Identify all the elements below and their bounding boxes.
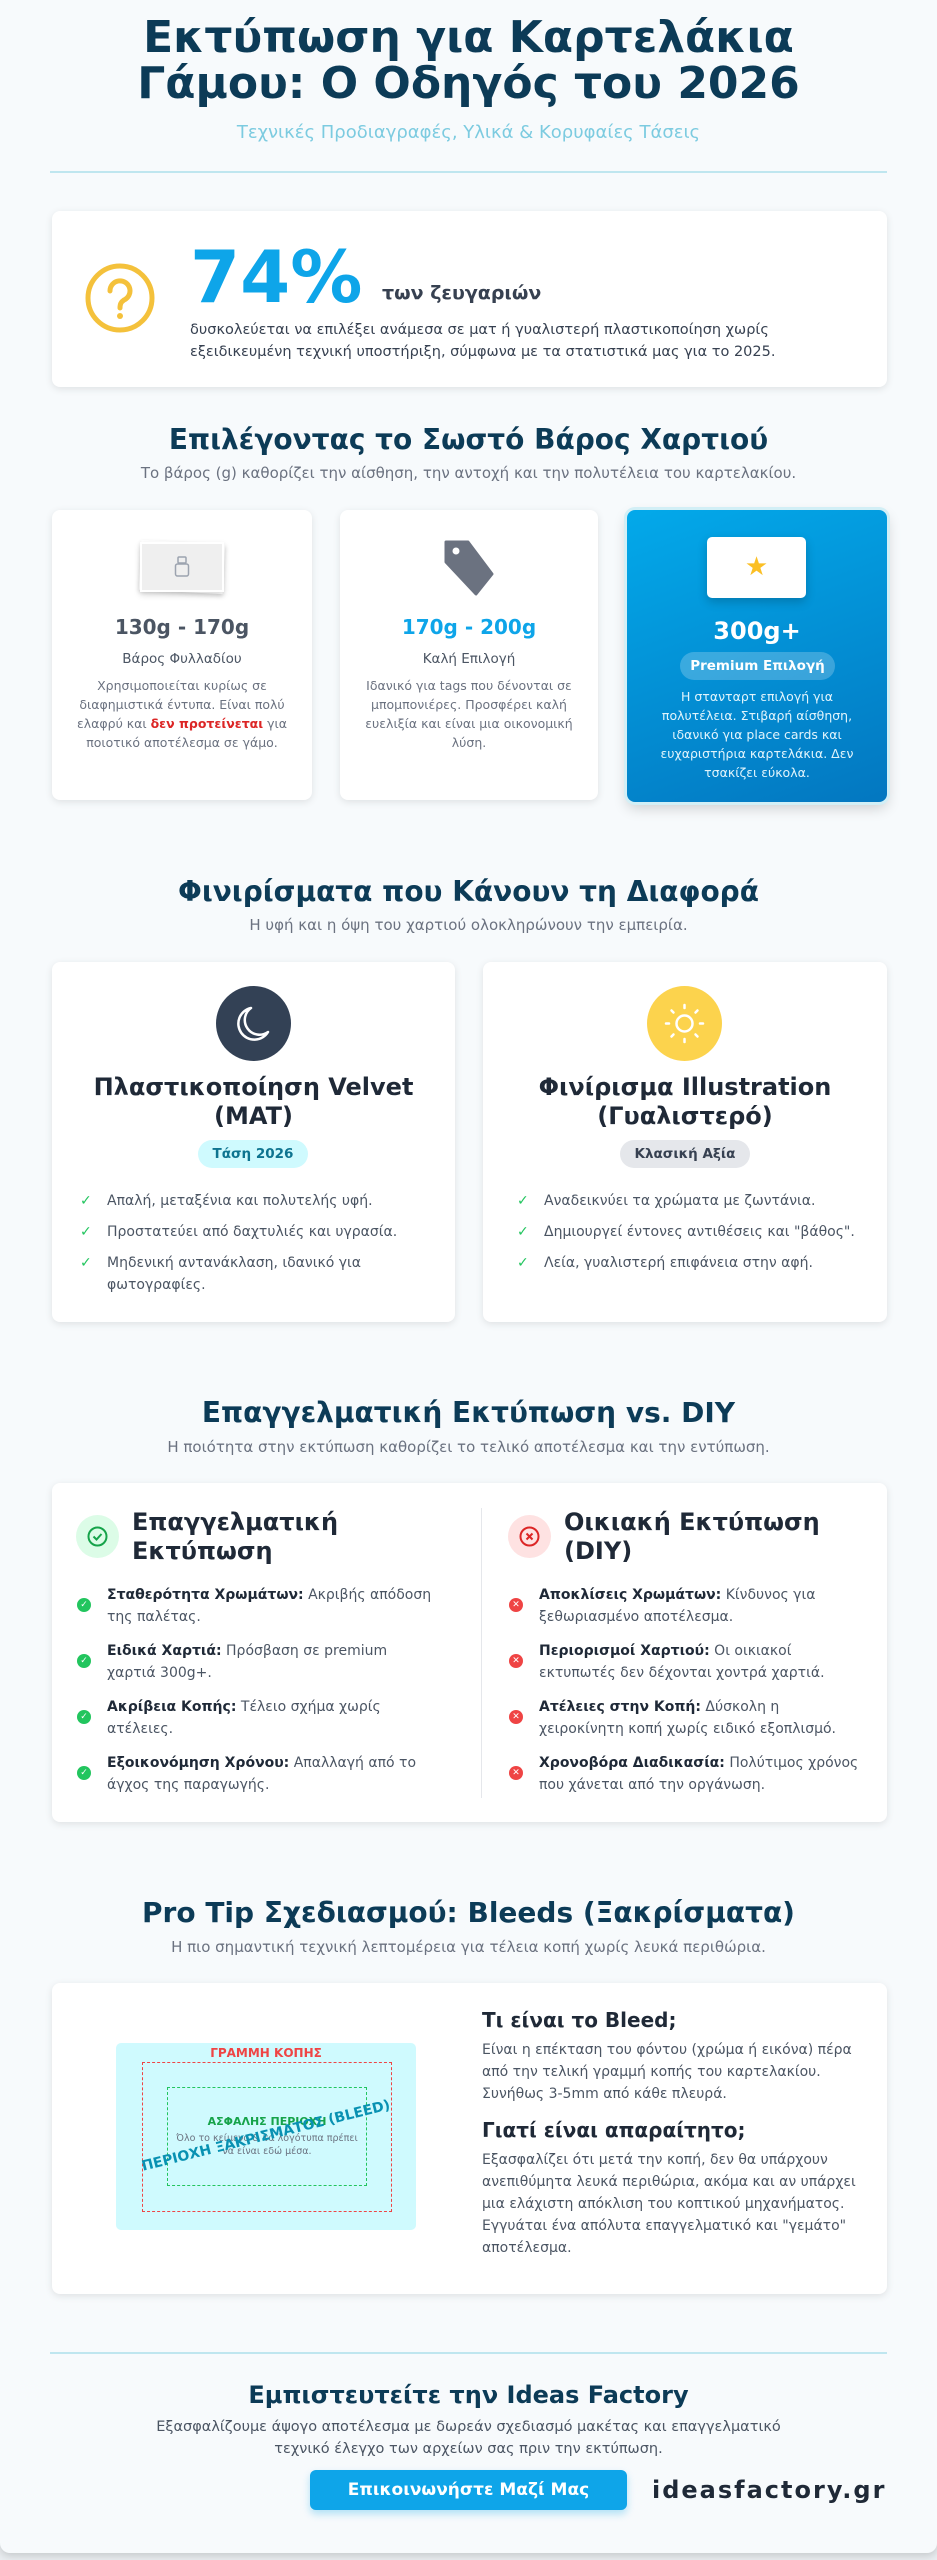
list: Αναδεικνύει τα χρώματα με ζωντάνια. xyxy=(544,1193,815,1209)
panel: 170-200g xyxy=(340,510,598,800)
list: ✓ xyxy=(80,1193,92,1209)
bleed diagram xyxy=(116,2043,416,2230)
diy list: ✕ xyxy=(512,1600,520,1610)
list: ✓ xyxy=(80,1255,92,1271)
panel: 130-170g xyxy=(52,510,312,800)
sub: bleeds: Η πιο σημαντική τεχνική λεπτομέρεια για τέλεια κοπή χωρίς λευκά περιθώρια. xyxy=(171,1938,766,1956)
weight: 300g+ xyxy=(713,617,801,645)
what is bleed: Είναι η επέκταση του φόντου (χρώμα ή εικόνα) πέρα από την τελική γραμμή κοπής του καρτελακίου. Συνήθως 3-5mm από κάθε πλευρά. xyxy=(482,2042,852,2102)
list: Δημιουργεί έντονες αντιθέσεις και "βάθος". xyxy=(544,1224,855,1240)
description: Χρησιμοποιείται κυρίως σε διαφημιστικά έντυπα. Είναι πολύ ελαφρύ και δεν προτείνεται για ποιοτικό αποτέλεσμα σε γάμο. xyxy=(77,678,287,750)
title: Γάμου: Ο Οδηγός του 2026 xyxy=(137,58,800,109)
bleed diagram: ΠΕΡΙΟΧΗ ΞΑΚΡΙΣΜΑΤΟΣ (BLEED) xyxy=(140,2097,392,2175)
badge: Κλασική Αξία xyxy=(635,1146,735,1162)
website: ideasfactory.gr xyxy=(652,2476,886,2504)
label: Καλή Επιλογή xyxy=(423,651,515,667)
heading: bleeds: Pro Tip Σχεδιασμού: Bleeds (Ξακρίσματα) xyxy=(142,1896,795,1929)
pro list: Εξοικονόμηση Χρόνου: Απαλλαγή από το άγχος της παραγωγής. xyxy=(107,1755,416,1793)
stat label: των ζευγαριών xyxy=(382,282,541,304)
title: Φινίρισμα Illustration xyxy=(539,1073,831,1101)
pro list xyxy=(77,1587,431,1793)
heading: finishes: Φινιρίσματα που Κάνουν τη Διαφορά xyxy=(178,875,759,908)
label: Βάρος Φυλλαδίου xyxy=(122,651,242,667)
diy list: ✕ xyxy=(512,1712,520,1722)
stat card xyxy=(52,211,887,387)
list: Προστατεύει από δαχτυλιές και υγρασία. xyxy=(107,1224,397,1240)
pro list: Ακρίβεια Κοπής: Τέλειο σχήμα χωρίς ατέλειες. xyxy=(107,1699,381,1737)
list: Απαλή, μεταξένια και πολυτελής υφή. xyxy=(107,1193,373,1209)
description: Η στανταρτ επιλογή για πολυτέλεια. Στιβαρή αίσθηση, ιδανικό για place cards και ευχαριστήρια καρτελάκια. Δεν τσακίζει εύκολα. xyxy=(661,689,853,780)
icon: paper stack xyxy=(136,541,228,598)
what is bleed: Εξασφαλίζει ότι μετά την κοπή, δεν θα υπάρχουν ανεπιθύμητα λευκά περιθώρια, ακόμα και αν υπάρχει μια ελάχιστη απόκλιση του κοπτικού μηχανήματος. Εγγυάται ένα απόλυτα επαγγελματικό και "γεμάτο" αποτέλεσμα. xyxy=(482,2152,856,2256)
pro title: Επαγγελματική xyxy=(132,1508,338,1536)
icon: question circle xyxy=(86,264,154,332)
icon: tag xyxy=(444,540,494,596)
pro title xyxy=(132,1508,338,1565)
weight: 170g - 200g xyxy=(402,615,536,639)
pro list: Σταθερότητα Χρωμάτων: Ακριβής απόδοση της παλέτας. xyxy=(107,1587,431,1625)
bleed diagram: ΑΣΦΑΛΗΣ ΠΕΡΙΟΧΗ xyxy=(208,2115,326,2128)
footer text: Εξασφαλίζουμε άψογο αποτέλεσμα με δωρεάν σχεδιασμό μακέτας και επαγγελματικό xyxy=(156,2419,781,2435)
list: ✓ xyxy=(517,1193,529,1209)
button xyxy=(310,2470,627,2510)
icon: diy cross xyxy=(508,1515,551,1558)
sub: pro vs diy: Η ποιότητα στην εκτύπωση καθορίζει το τελικό αποτέλεσμα και την εντύπωση. xyxy=(167,1438,770,1456)
diy list: Περιορισμοί Χαρτιού: Οι οικιακοί εκτυπωτές δεν δέχονται χοντρά χαρτιά. xyxy=(539,1643,825,1681)
list: ✓ xyxy=(80,1224,92,1240)
panel: velvet matte xyxy=(52,962,455,1322)
panel: comparison xyxy=(52,1483,887,1822)
badge xyxy=(620,1140,750,1168)
stat number: 74% xyxy=(190,235,362,319)
diy list: Χρονοβόρα Διαδικασία: Πολύτιμος χρόνος που χάνεται από την οργάνωση. xyxy=(539,1755,858,1793)
pro list: Ειδικά Χαρτιά: Πρόσβαση σε premium χαρτιά 300g+. xyxy=(107,1643,387,1681)
pro list: ✓ xyxy=(80,1656,88,1666)
diy list: ✕ xyxy=(512,1768,520,1778)
stat description: δυσκολεύεται να επιλέξει ανάμεσα σε ματ ή γυαλιστερή πλαστικοποίηση χωρίς εξειδικευμένη τεχνική υποστήριξη, σύμφωνα με τα στατιστικά μας για το 2025. xyxy=(190,322,775,360)
diy list xyxy=(509,1587,858,1793)
diy list: Αποκλίσεις Χρωμάτων: Κίνδυνος για ξεθωριασμένο αποτέλεσμα. xyxy=(539,1587,815,1625)
title xyxy=(539,1073,831,1130)
sub: finishes: Η υφή και η όψη του χαρτιού ολοκληρώνουν την εμπειρία. xyxy=(249,916,688,934)
pro list: ✓ xyxy=(80,1768,88,1778)
badge xyxy=(198,1140,308,1168)
button: Επικοινωνήστε Μαζί Μας xyxy=(348,2480,589,2500)
pro list: ✓ xyxy=(80,1600,88,1610)
bleed diagram: Όλο το κείμενο & τα λογότυπα πρέπει xyxy=(176,2133,358,2144)
footer text xyxy=(156,2419,781,2457)
footer heading: Εμπιστευτείτε την Ideas Factory xyxy=(248,2381,689,2409)
list: Μηδενική αντανάκλαση, ιδανικό για φωτογραφίες. xyxy=(107,1255,361,1293)
title: Πλαστικοποίηση Velvet xyxy=(94,1073,413,1101)
panel: bleed xyxy=(52,1983,887,2294)
list: ✓ xyxy=(517,1255,529,1271)
list: Λεία, γυαλιστερή επιφάνεια στην αφή. xyxy=(544,1255,813,1271)
panel: 300g+ xyxy=(627,510,887,802)
bleed diagram: να είναι εδώ μέσα. xyxy=(222,2146,312,2157)
title xyxy=(137,12,800,109)
diy list: Ατέλειες στην Κοπή: Δύσκολη η χειροκίνητη κοπή χωρίς ειδικό εξοπλισμό. xyxy=(539,1699,836,1737)
pro title: Εκτύπωση xyxy=(132,1537,273,1565)
what is bleed: Τι είναι το Bleed; xyxy=(482,2008,676,2032)
panel: illustration gloss xyxy=(483,962,887,1322)
badge xyxy=(680,652,835,680)
icon: pro check xyxy=(76,1515,119,1558)
bleed diagram: ΓΡΑΜΜΗ ΚΟΠΗΣ xyxy=(210,2046,322,2060)
heading: paper weight: Επιλέγοντας το Σωστό Βάρος Χαρτιού xyxy=(169,423,768,456)
what is bleed xyxy=(482,2008,856,2256)
what is bleed: Γιατί είναι απαραίτητο; xyxy=(482,2118,746,2142)
subtitle: Τεχνικές Προδιαγραφές, Υλικά & Κορυφαίες Τάσεις xyxy=(237,122,700,143)
pro list: ✓ xyxy=(80,1712,88,1722)
list xyxy=(517,1193,855,1271)
diy list: ✕ xyxy=(512,1656,520,1666)
list: ✓ xyxy=(517,1224,529,1240)
weight: 130g - 170g xyxy=(115,615,249,639)
icon: star card xyxy=(707,537,806,598)
title xyxy=(94,1073,413,1130)
heading: pro vs diy: Επαγγελματική Εκτύπωση vs. DIY xyxy=(202,1396,735,1429)
footer text: τεχνικό έλεγχο των αρχείων σας πριν την εκτύπωση. xyxy=(274,2441,663,2457)
icon: sun xyxy=(647,986,722,1061)
badge: Τάση 2026 xyxy=(213,1146,293,1162)
icon: star card: ★ xyxy=(745,552,768,582)
title: (MAT) xyxy=(214,1102,293,1130)
sub: paper weight: Το βάρος (g) καθορίζει την αίσθηση, την αντοχή και την πολυτέλεια του καρτελακίου. xyxy=(141,464,796,482)
badge: Premium Επιλογή xyxy=(690,658,825,674)
title: Εκτύπωση για Καρτελάκια xyxy=(143,12,794,63)
icon: moon xyxy=(216,986,291,1061)
diy title: (DIY) xyxy=(564,1537,632,1565)
diy title: Οικιακή Εκτύπωση xyxy=(564,1508,820,1536)
list xyxy=(80,1193,397,1293)
description: Ιδανικό για tags που δένονται σε μπομπονιέρες. Προσφέρει καλή ευελιξία και είναι μια οικονομική λύση. xyxy=(365,678,573,750)
diy title xyxy=(564,1508,820,1565)
title: (Γυαλιστερό) xyxy=(597,1102,773,1130)
